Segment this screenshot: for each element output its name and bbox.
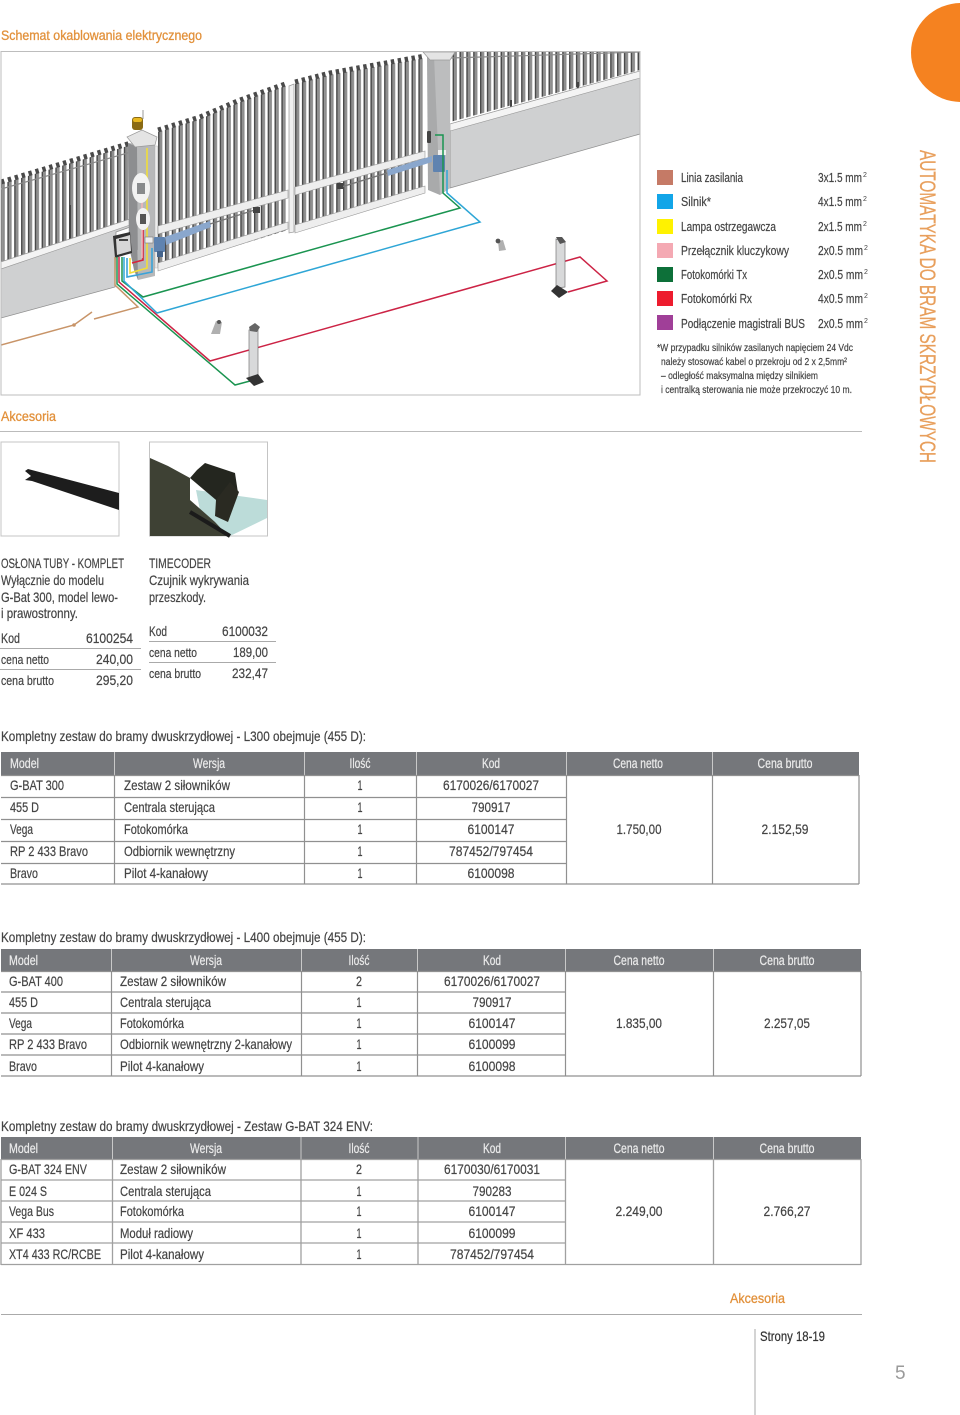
photocell column right [551,237,568,298]
rows: Pilot 4-kanałowy [120,1058,204,1074]
rows: Fotokomórka [120,1015,184,1031]
photocell bubbles [132,173,150,230]
legend footnote: – odległość maksymalna między silnikiem [661,371,818,382]
rows: 6100098 [468,865,515,881]
legend: photocells Tx: 2 [864,269,868,276]
legend: photocells Tx [657,267,868,282]
key switch right [496,239,506,251]
header row: Wersja [193,756,225,771]
legend footnote: należy stosować kabel o przekroju od 2 x 2,5mm² [661,357,848,368]
accessory: timecoder text: 189,00 [233,644,268,660]
table: L300 [1,752,859,884]
legend: motor [657,194,867,209]
header row: Model [9,953,38,968]
legend footnote [657,343,853,396]
rows [10,777,539,881]
rows: 6100098 [468,1058,516,1074]
legend: motor: Silnik* [681,194,711,209]
header row: Ilość [348,1141,370,1156]
accessory: tube cover text: OSŁONA TUBY - KOMPLET [1,555,124,571]
prices [616,821,809,837]
legend footnote: *W przypadku silników zasilanych napięciem 24 Vdc [657,343,853,354]
accessory: tube cover text [0,555,141,688]
header row [1,1137,861,1159]
title: wiring diagram: Schemat okablowania elektrycznego [1,27,202,43]
footer heading: accessories: Akcesoria [730,1290,785,1306]
left post [127,110,158,280]
rows: Vega Bus [9,1203,54,1219]
rows: 6100147 [468,1203,516,1219]
rows: G-BAT 400 [9,973,63,989]
header row: Wersja [190,1141,222,1156]
header row: Cena netto [614,1141,664,1156]
legend: BUS: 2x0.5 mm [818,316,863,331]
rows: Vega [9,1015,32,1031]
legend footnote: i centralką sterowania nie może przekroczyć 10 m. [661,385,852,396]
accessory: timecoder text [149,555,276,681]
accessory: timecoder text: TIMECODER [149,555,211,571]
legend: warning lamp [657,219,867,234]
prices: 2.249,00 [616,1203,663,1219]
rows: XT4 433 RC/RCBE [9,1246,101,1262]
rows: 6170026/6170027 [444,973,540,989]
header row: Model [9,1141,38,1156]
post wires [127,148,152,277]
header row: Cena brutto [760,953,814,968]
legend: key switch [657,243,868,258]
rows: Centrala sterująca [120,994,211,1010]
rows: Centrala sterująca [124,799,215,815]
header row: Kod [483,953,501,968]
rows: Vega [10,821,33,837]
legend: photocells Rx [657,291,868,306]
prices: 2.257,05 [764,1015,810,1031]
cables [1,135,607,385]
rows: Pilot 4-kanałowy [120,1246,204,1262]
rows: G-BAT 300 [10,777,64,793]
rows: 6170030/6170031 [444,1161,540,1177]
accessory: timecoder text: 6100032 [222,623,268,639]
accessory: timecoder text: Czujnik wykrywania [149,572,249,588]
header row: Ilość [348,953,370,968]
prices: 1.750,00 [616,821,662,837]
centre stile [289,84,294,233]
legend: motor: 4x1.5 mm [818,194,862,209]
footer: pages reference: Strony 18-19 [760,1328,825,1344]
left actuator [145,207,260,257]
header row: Kod [483,1141,501,1156]
heading: accessories: Akcesoria [1,408,56,424]
left gate leaf [158,83,288,271]
switch node [72,323,76,327]
left wall [1,218,133,318]
header row: Cena brutto [760,1141,814,1156]
rows: 2 [356,973,362,989]
accessory: tube cover text: 295,20 [96,672,133,688]
rows [9,973,540,1074]
right post [423,52,455,195]
header row [1,949,861,971]
rows: 790917 [472,994,512,1010]
rows: 787452/797454 [450,1246,534,1262]
rows: 1 [356,1246,362,1262]
rows: 1 [358,777,363,793]
legend: power line [657,170,867,185]
heading: L300 table: Kompletny zestaw do bramy dwuskrzydłowej - L300 obejmuje (455 D): [1,728,366,744]
header row: Cena netto [613,756,663,771]
rows: 790283 [472,1183,512,1199]
accessory: timecoder text: 232,47 [232,665,268,681]
legend: key switch: 2 [864,245,868,252]
rows: Bravo [9,1058,37,1074]
illustration frame [1,52,640,395]
photo: timecoder [150,442,268,536]
photocell column left [246,323,264,386]
header row: Wersja [190,953,222,968]
rows: 2 [356,1161,362,1177]
legend: power line: 2 [863,172,867,179]
legend: warning lamp: Lampa ostrzegawcza [681,219,777,234]
rows: 6170026/6170027 [443,777,539,793]
rows: 1 [356,1183,362,1199]
rows: Odbiornik wewnętrzny 2-kanałowy [120,1036,292,1052]
rows: 1 [356,994,362,1010]
heading: L400 table: Kompletny zestaw do bramy dwuskrzydłowej - L400 obejmuje (455 D): [1,929,366,945]
photo: tube cover [1,442,119,536]
side heading: AUTOMATYKA DO BRAM SKRZYDŁOWYCH [915,150,940,463]
legend: photocells Rx: 2 [864,293,868,300]
rows: Odbiornik wewnętrzny [124,843,235,859]
accessory: timecoder text: Kod [149,623,167,639]
legend: photocells Rx: Fotokomórki Rx [681,291,752,306]
rows: 1 [356,1225,362,1241]
control box [113,232,132,258]
grid [1,775,859,884]
legend: key switch: 2x0.5 mm [818,243,863,258]
corner tab: orange [911,3,960,102]
prices: 2.152,59 [762,821,809,837]
accessory: tube cover text: cena brutto [1,673,54,688]
rows: G-BAT 324 ENV [9,1161,88,1177]
header row: Cena netto [614,953,664,968]
accessory: tube cover text: 240,00 [96,651,133,667]
accessory: tube cover text: cena netto [1,652,49,667]
rows: Centrala sterująca [120,1183,211,1199]
legend [657,170,868,331]
panel: gate wiring illustration [1,52,640,386]
prices: 2.766,27 [764,1203,811,1219]
rows: Zestaw 2 siłowników [120,1161,227,1177]
legend: BUS: 2 [864,318,868,325]
right wall [450,71,640,188]
header row [1,752,859,775]
rows: Fotokomórka [124,821,188,837]
rows: Fotokomórka [120,1203,184,1219]
legend: warning lamp: 2x1.5 mm [818,219,862,234]
legend: photocells Tx: Fotokomórki Tx [681,267,747,282]
rows: RP 2 433 Bravo [10,843,88,859]
heading: G-BAT 324 ENV table: Kompletny zestaw do bramy dwuskrzydłowej - Zestaw G-BAT 324 ENV: [1,1118,373,1134]
rows: 6100099 [468,1036,516,1052]
warning lamp [132,110,143,130]
rows: 6100099 [468,1225,516,1241]
header row: Kod [482,756,500,771]
prices [616,1015,810,1031]
accessory: timecoder text: cena brutto [149,666,201,681]
legend: BUS: Podłączenie magistrali BUS [681,316,805,331]
rows: 790917 [472,799,511,815]
rows: 1 [356,1015,362,1031]
legend: photocells Tx: 2x0.5 mm [818,267,863,282]
rows: 1 [356,1036,362,1052]
rows: 6100147 [468,1015,516,1031]
rows: 6100147 [468,821,515,837]
page number: 5 [895,1363,906,1384]
rows: 1 [358,799,363,815]
accessory: timecoder text: przeszkody. [149,589,206,605]
rows: Zestaw 2 siłowników [124,777,231,793]
accessory: tube cover text: G-Bat 300, model lewo- [1,589,118,605]
rows: 1 [356,1203,362,1219]
header row: Model [10,756,39,771]
right gate leaf [295,56,425,233]
rows: 455 D [9,994,38,1010]
header row: Cena brutto [758,756,812,771]
grid [1,971,861,1076]
rows: Bravo [10,865,38,881]
accessory: tube cover text: i prawostronny. [1,605,78,621]
legend: power line: Linia zasilania [681,170,744,185]
right fence [450,52,640,122]
table: L400 [1,949,861,1076]
rows: Pilot 4-kanałowy [124,865,208,881]
prices: 1.835,00 [616,1015,662,1031]
grid [1,1159,861,1265]
prices [616,1203,811,1219]
rows: RP 2 433 Bravo [9,1036,87,1052]
accessory: tube cover text: 6100254 [86,630,133,646]
rows [9,1161,540,1262]
rows: 1 [358,843,363,859]
accessory: timecoder text: cena netto [149,645,197,660]
table: G-BAT 324 ENV [1,1137,861,1265]
accessory: tube cover text: Kod [1,630,20,646]
legend: key switch: Przełącznik kluczykowy [681,243,789,258]
rows: 1 [358,821,363,837]
legend: motor: 2 [863,196,867,203]
accessory: tube cover text: Wyłącznie do modelu [1,572,104,588]
header row: Ilość [350,756,371,771]
rows: Zestaw 2 siłowników [120,973,227,989]
legend: power line: 3x1.5 mm [818,170,862,185]
rows: 455 D [10,799,39,815]
legend: photocells Rx: 4x0.5 mm [818,291,863,306]
rows: Moduł radiowy [120,1225,193,1241]
left fence [1,143,131,263]
rows: E 024 S [9,1183,47,1199]
rows: XF 433 [9,1225,45,1241]
rows: 1 [358,865,363,881]
right actuator [337,150,446,189]
legend: warning lamp: 2 [863,221,867,228]
key switch left [211,320,222,334]
rows: 1 [356,1058,362,1074]
rows: 787452/797454 [449,843,533,859]
